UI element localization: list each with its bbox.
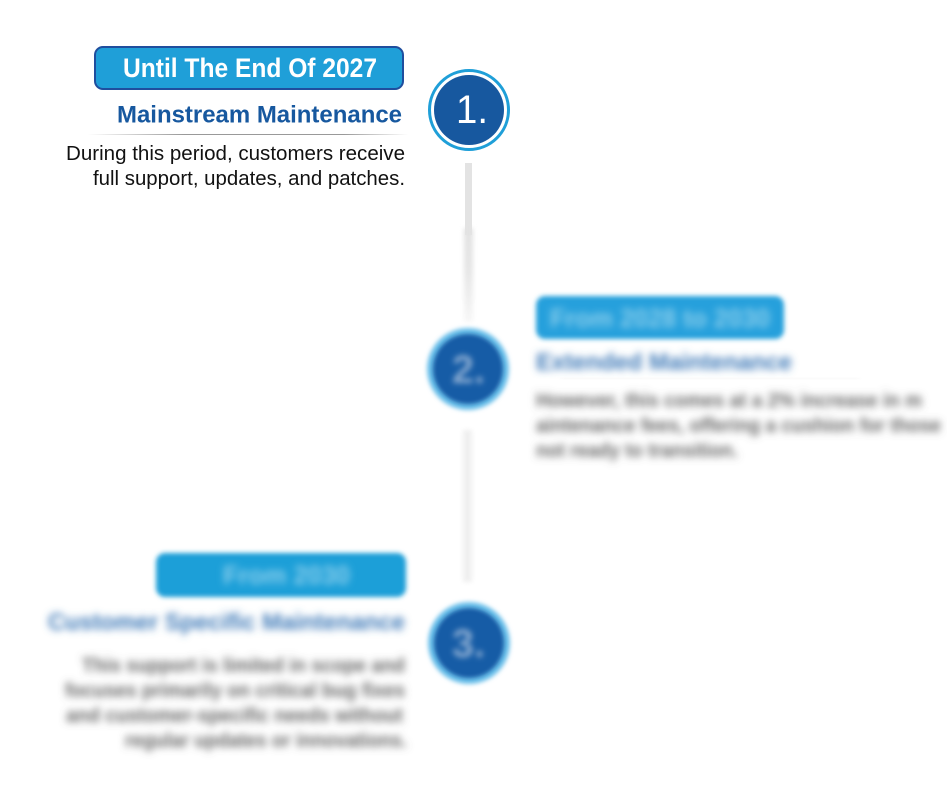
step 2 number circle <box>427 328 509 410</box>
step 3 number circle <box>428 602 510 684</box>
step 3 body text: This support is limited in scope and <box>82 655 405 677</box>
step 2 body text: not ready to transition. <box>536 440 738 462</box>
connector line 1 to 2 <box>464 163 473 322</box>
step 3 number circle: 3. <box>452 622 485 666</box>
step 2 number circle: 2. <box>452 348 485 392</box>
step 1 date badge <box>95 47 403 89</box>
step 3 date badge <box>156 553 406 597</box>
step 1 panel <box>66 47 408 190</box>
step 1 date badge: Until The End Of 2027 <box>123 53 377 83</box>
step 3 body text <box>65 655 407 752</box>
step 3 body text: focuses primarily on critical bug fixes <box>65 680 405 702</box>
connector line 2 to 3 <box>463 430 472 582</box>
step 1 heading: Mainstream Maintenance <box>117 102 402 128</box>
step 3 panel <box>48 553 407 752</box>
step 3 body text: regular updates or innovations. <box>125 730 407 752</box>
step 2 panel <box>536 296 941 462</box>
step 1 number circle: 1. <box>456 88 488 132</box>
step 1 body text <box>66 143 405 190</box>
step 2 date badge <box>536 296 784 339</box>
step 3 body text: and customer-specific needs without <box>66 705 403 727</box>
step 2 heading: Extended Maintenance <box>536 349 792 376</box>
step 2 body text: However, this comes at a 2% increase in m <box>536 390 922 412</box>
step 3 date badge: From 2030 <box>223 560 350 590</box>
step 2 body text <box>536 390 941 462</box>
step 2 date badge: From 2028 to 2030 <box>550 303 770 333</box>
step 1 number circle <box>430 70 508 150</box>
step 1 body text: full support, updates, and patches. <box>93 168 405 190</box>
step 1 body text: During this period, customers receive <box>66 143 405 165</box>
step 3 heading: Customer Specific Maintenance <box>48 609 405 636</box>
